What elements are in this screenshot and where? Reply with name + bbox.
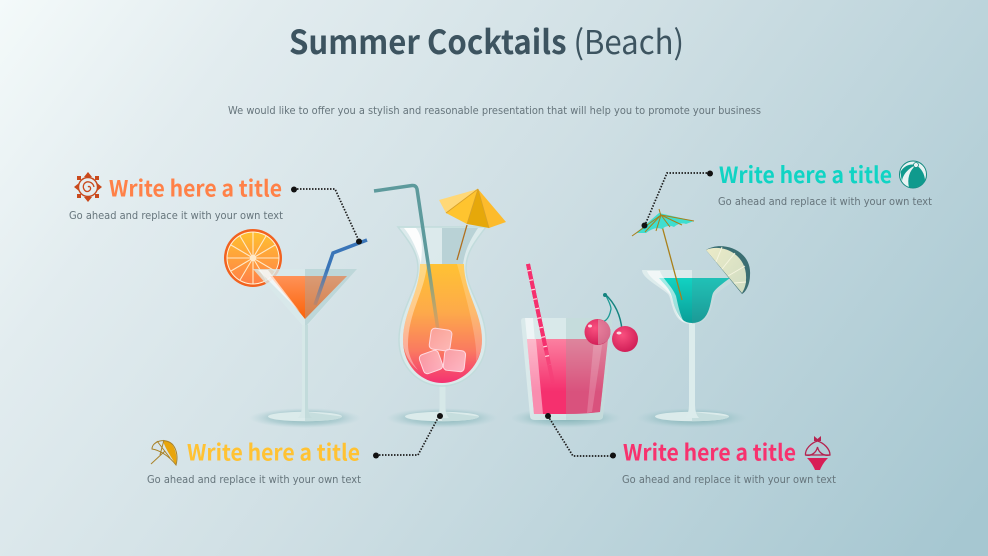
cocktail: martini with orange slice [224,229,367,428]
body text: Go ahead and replace it with your own text [69,210,283,222]
body text: Go ahead and replace it with your own text [147,474,361,486]
orange slice [224,229,282,287]
callout: teal [718,158,932,208]
connector: yellow title to hurricane glass [373,413,443,458]
cherries [584,293,638,352]
tumbler glass [521,318,612,420]
icon: bikini [805,436,830,470]
straw [374,185,438,330]
orange liquid [270,276,347,319]
ice cubes [418,328,466,375]
heading: Write here a title [109,172,282,204]
body text: Go ahead and replace it with your own text [718,196,932,208]
layered liquid [403,264,482,383]
subtitle: We would like to offer you a stylish and reasonable presentation that will help you to promote your business [228,105,761,117]
glass body [398,227,486,386]
icon: sun spiral [74,172,102,202]
cocktail umbrella [439,189,506,260]
connector: teal title to umbrella [642,170,713,228]
cocktail: hurricane glass with umbrella [374,185,506,428]
icon: beach ball [900,161,926,188]
callout: yellow [147,436,361,486]
connector: pink title to tumbler [545,413,616,458]
stem and base [405,383,479,421]
glass bowl [642,270,742,324]
glass shadow [386,408,498,428]
stem and base [655,323,729,421]
connector: orange title to blue straw [291,186,362,244]
title: Summer Cocktails (Beach) [289,16,684,64]
heading: Write here a title [719,158,892,190]
glass shadow [636,408,748,428]
lime wedge [706,246,750,294]
callout: pink [622,436,836,486]
cocktail: margarita with lime [632,209,750,428]
heading: Write here a title [623,436,796,468]
cocktail: pink tumbler with cherries [510,264,638,428]
callout: orange [69,172,283,222]
glass shadow [510,408,622,428]
glass bowl [253,269,357,325]
icon: beach umbrella [151,440,177,465]
teal cocktail umbrella [632,209,694,300]
pink liquid [527,339,608,414]
stem and base [268,322,342,421]
heading: Write here a title [187,436,360,468]
glass shadow [249,408,361,428]
body text: Go ahead and replace it with your own text [622,474,836,486]
teal liquid [659,278,730,323]
blue straw [315,240,367,305]
striped straw [528,264,553,383]
